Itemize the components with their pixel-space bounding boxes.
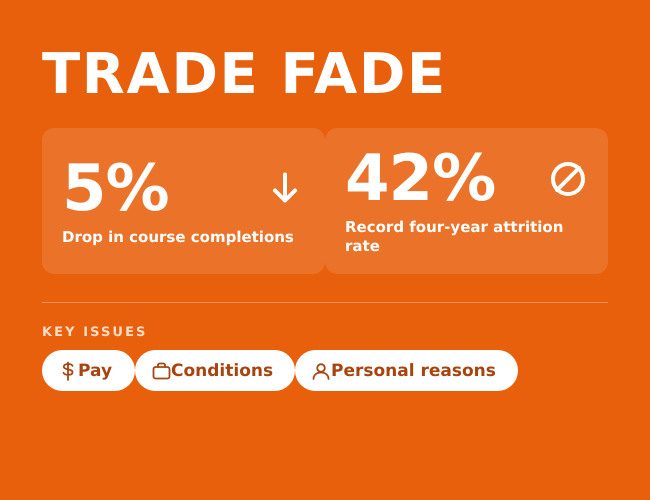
pill: Conditions: Conditions (171, 360, 273, 380)
stat label: Drop in course completions (62, 228, 294, 246)
icon: prohibited sign (551, 162, 585, 196)
stat value: 5%: 5% (62, 152, 169, 226)
icon: down arrow (272, 172, 298, 203)
section heading: KEY ISSUES (42, 325, 147, 340)
icon: person (312, 363, 330, 380)
icon: dollar (62, 362, 74, 381)
pill: Pay: Pay (78, 360, 112, 380)
stat label: rate (345, 237, 380, 255)
pill: Conditions (135, 350, 295, 391)
title: TRADE FADE (42, 42, 447, 107)
panel: attrition stat (325, 128, 608, 274)
stat label: Record four-year attrition (345, 218, 563, 236)
stat label (345, 218, 563, 255)
panel: course completions stat (42, 128, 325, 274)
pill: Pay (42, 350, 135, 391)
divider (42, 302, 608, 303)
pill: Personal reasons: Personal reasons (331, 360, 496, 380)
icon: briefcase (152, 362, 170, 380)
stat value: 42%: 42% (345, 142, 495, 216)
pill: Personal reasons (295, 350, 518, 391)
